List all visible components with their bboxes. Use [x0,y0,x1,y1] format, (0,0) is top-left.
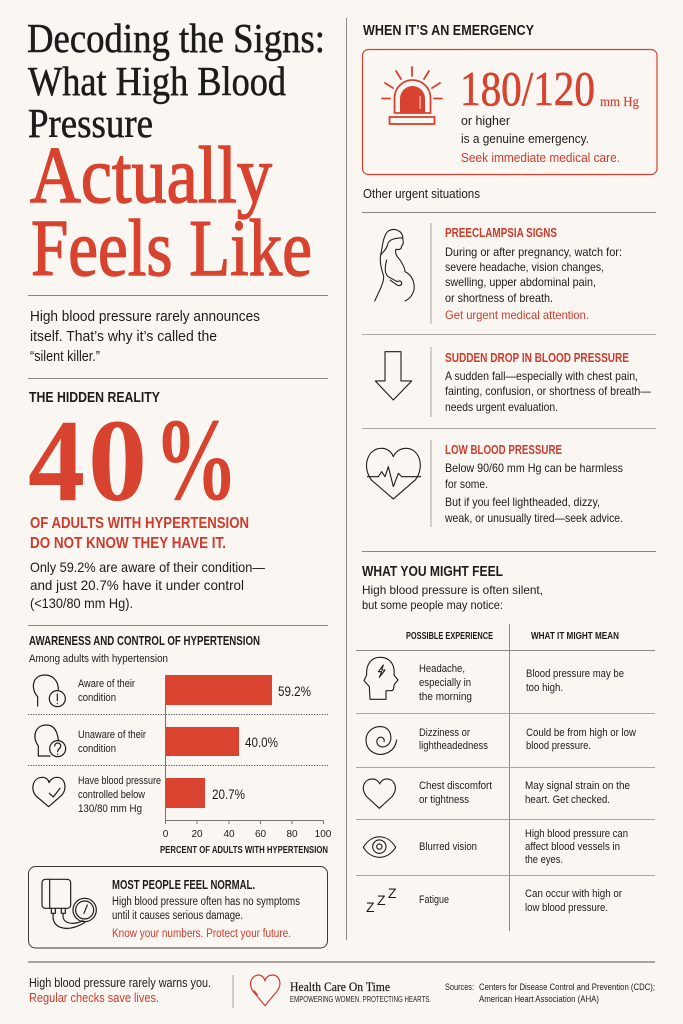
table header: WHAT IT MIGHT MEAN [531,631,619,642]
statistic caption: DO NOT KNOW THEY HAVE IT. [30,535,226,552]
sources: American Heart Association (AHA) [479,994,599,1004]
row: dizziness: lightheadedness [419,740,488,752]
bar chart: 20 [191,829,203,840]
row: dizziness: blood pressure. [526,740,591,752]
panel: low blood pressure: Below 90/60 mm Hg can be harmless [445,461,623,475]
callout: most people feel normal: Know your numbers. Protect your future. [112,928,291,940]
bar chart: 60 [255,829,266,840]
panel: emergency callout: is a genuine emergency. [461,131,589,146]
icon: blood pressure monitor [42,879,96,928]
row labels: controlled below [78,789,145,801]
heading: what you might feel: WHAT YOU MIGHT FEEL [362,564,503,580]
row labels: condition [78,692,116,704]
panel: preeclampsia signs: or shortness of breath. [445,291,553,305]
icon: sleep letters [366,885,397,915]
heading: what you might feel: but some people may notice: [362,598,503,612]
intro text [30,309,260,365]
intro text: itself. That’s why it’s called the [30,329,217,345]
row labels: condition [78,743,116,755]
bar chart: 0 [163,829,169,840]
big statistic [28,394,238,526]
heading: THE HIDDEN REALITY [29,389,160,406]
table header [406,631,619,642]
row labels: Have blood pressure [78,775,161,787]
row: fatigue: low blood pressure. [525,902,608,914]
row: blurred vision: affect blood vessels in [525,841,620,853]
logo: health care on time: EMPOWERING WOMEN. PROTECTING HEARTS. [290,995,431,1004]
row: chest discomfort: May signal strain on the [525,780,630,792]
statistic caption [30,515,249,552]
row: blurred vision: High blood pressure can [525,828,628,840]
logo: health care on time: Health Care On Time [290,979,390,994]
subheading: other urgent situations: Other urgent situations [363,187,480,201]
sources: Centers for Disease Control and Prevention (CDC); [479,982,655,992]
logo: health care on time [251,975,431,1006]
title: Actually [30,130,272,220]
icon: heart with pulse [367,448,421,499]
panel: preeclampsia signs: PREECLAMPSIA SIGNS [445,226,557,240]
panel: preeclampsia signs [375,226,622,322]
bar chart: 80 [286,829,298,840]
supporting text: Only 59.2% are aware of their condition— [30,559,265,575]
table header: POSSIBLE EXPERIENCE [406,631,493,642]
supporting text: (<130/80 mm Hg). [30,595,133,611]
panel: awareness and control chart [28,634,332,856]
bar chart: 20.7% [212,786,245,802]
icon: pregnant woman [375,229,414,301]
bar chart: PERCENT OF ADULTS WITH HYPERTENSION [160,845,328,856]
panel: emergency callout: Seek immediate medical care. [461,150,620,165]
icon: heart logo [251,975,280,1006]
callout: most people feel normal: MOST PEOPLE FEEL NORMAL. [112,877,255,892]
callout: most people feel normal: until it causes serious damage. [112,910,243,922]
row: dizziness: Could be from high or low [526,727,636,739]
icon: heart [363,779,395,808]
row: headache: especially in [419,677,471,689]
panel: low blood pressure: for some. [445,477,488,491]
title: Decoding the Signs: [27,15,325,61]
bar chart: 100 [315,829,332,840]
panel: preeclampsia signs: Get urgent medical attention. [445,308,589,322]
heading: what you might feel [362,564,543,612]
icon: siren [382,67,442,124]
supporting text: and just 20.7% have it under control [30,577,244,593]
row: chest discomfort: or tightness [419,794,469,806]
footer message: Regular checks save lives. [29,991,159,1005]
panel: emergency callout [362,50,657,174]
panel: preeclampsia signs: severe headache, vision changes, [445,260,604,274]
row: headache: Headache, [419,663,465,675]
panel: low blood pressure: But if you feel lightheaded, dizzy, [445,495,600,509]
icon: head with exclamation [33,675,65,707]
icon: sleep letters: Z [366,899,375,915]
panel: low blood pressure [367,443,623,525]
row: dizziness [366,727,636,754]
table: symptoms and meanings [356,624,655,931]
icon: heart with check [33,777,65,807]
icon: spiral [366,727,397,754]
sources: Sources: [445,982,474,992]
row: chest discomfort [363,779,630,808]
row labels: Unaware of their [78,729,146,741]
panel: sudden drop in blood pressure: SUDDEN DROP IN BLOOD PRESSURE [445,351,629,365]
panel: the hidden reality [28,389,265,611]
row labels: 130/80 mm Hg [78,803,142,815]
big statistic: 4 [28,395,85,526]
panel: emergency callout: 180/120 [460,61,595,116]
footer message: High blood pressure rarely warns you. [29,976,211,990]
icon: down arrow [375,352,412,400]
intro text: High blood pressure rarely announces [30,309,260,325]
bar chart: 59.2% [278,683,311,699]
panel: preeclampsia signs: During or after pregnancy, watch for: [445,245,622,259]
bar chart: 40.0% [245,734,278,750]
intro text: “silent killer.” [30,349,100,365]
bar chart [160,675,332,856]
callout: most people feel normal [28,866,328,948]
icon: head with lightning bolt [364,657,398,699]
row: chest discomfort: heart. Get checked. [525,794,610,806]
row: blurred vision [363,828,628,866]
row: headache: Blood pressure may be [526,668,624,680]
row: blurred vision: the eyes. [525,854,563,866]
callout: most people feel normal: High blood pressure often has no symptoms [112,896,300,908]
panel: sudden drop in blood pressure: needs urgent evaluation. [445,400,558,414]
chart heading: AWARENESS AND CONTROL OF HYPERTENSION [29,634,260,648]
bar chart: 40 [223,829,235,840]
row: blurred vision: Blurred vision [419,841,477,853]
title: What High Blood [28,58,286,104]
panel: preeclampsia signs: swelling, upper abdominal pain, [445,275,596,289]
row labels: Aware of their [78,678,135,690]
chart subtitle: Among adults with hypertension [29,653,168,665]
row: dizziness: Dizziness or [419,727,470,739]
panel: low blood pressure: weak, or unusually tired—seek advice. [444,511,623,525]
big statistic: 0 [88,395,147,526]
icon: head with question mark [35,725,66,757]
statistic caption: OF ADULTS WITH HYPERTENSION [30,515,249,532]
panel: sudden drop in blood pressure: A sudden fall—especially with chest pain, [445,369,638,383]
row: headache: the morning [419,691,472,703]
icon: sleep letters: Z [377,892,386,908]
panel: emergency callout: or higher [461,113,511,128]
footer message [29,976,211,1005]
panel: sudden drop in blood pressure: fainting, confusion, or shortness of breath— [445,384,651,398]
heading: when it's an emergency: WHEN IT’S AN EMERGENCY [363,23,534,39]
row: fatigue: Can occur with high or [525,888,622,900]
icon: sleep letters: Z [388,885,397,901]
panel: sudden drop in blood pressure [375,351,651,414]
supporting text [30,559,265,611]
row: chest discomfort: Chest discomfort [419,780,492,792]
icon: eye [363,837,396,857]
panel: emergency callout: mm Hg [600,95,639,110]
row: fatigue [366,885,622,915]
title: Pressure [28,100,153,146]
title [27,15,325,293]
big statistic: % [154,394,238,525]
heading: what you might feel: High blood pressure is often silent, [362,583,543,597]
row: headache [364,657,624,703]
sources [445,982,655,1004]
panel: low blood pressure: LOW BLOOD PRESSURE [445,443,562,457]
row labels [78,678,161,815]
title: Feels Like [31,203,312,293]
row: headache: too high. [526,682,563,694]
row: fatigue: Fatigue [419,894,449,906]
